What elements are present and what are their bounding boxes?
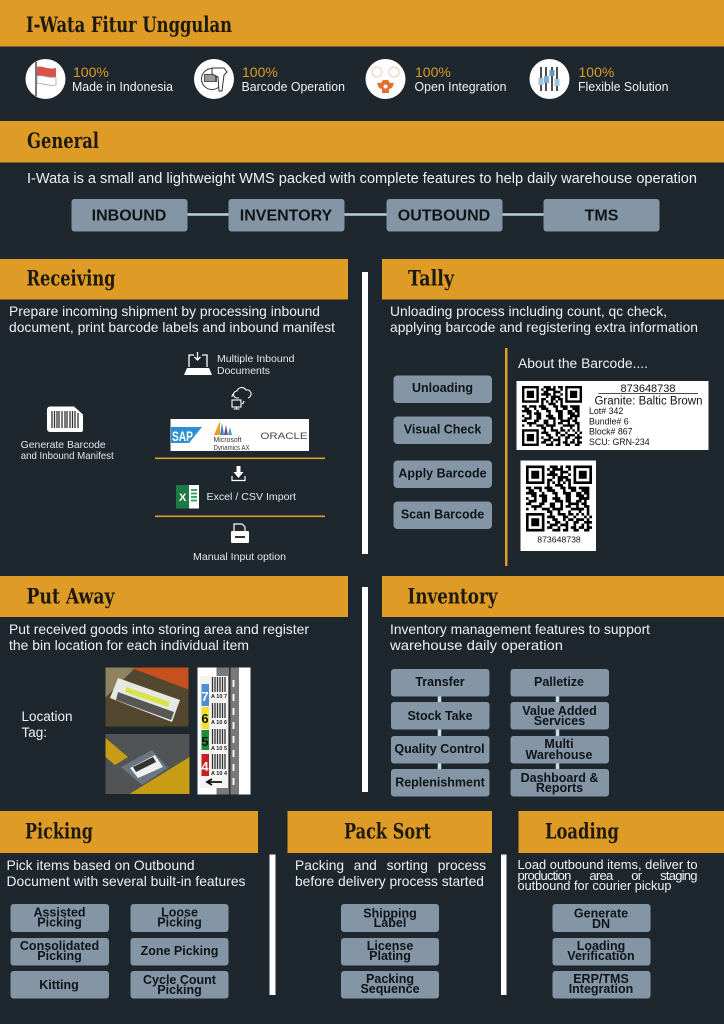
button: Unloading xyxy=(394,376,492,403)
icon: flag xyxy=(26,59,66,99)
button: Cycle Count Picking: Picking xyxy=(157,983,202,997)
button: Shipping Label: Shipping xyxy=(363,906,417,920)
button: Zone Picking: Zone Picking xyxy=(141,944,218,958)
text: Location Tag: Location xyxy=(22,709,73,724)
photo: floor location tag xyxy=(106,734,190,794)
text: Receiving description: Prepare incoming shipment by processing inbound xyxy=(9,303,320,319)
heading band: Inventory: Inventory xyxy=(408,584,498,608)
button: Consolidated Picking: Consolidated xyxy=(20,939,99,953)
barcode label: large: Lot# 342 xyxy=(589,406,623,416)
heading band: Loading: Loading xyxy=(545,818,619,844)
button: Shipping Label: Label xyxy=(374,916,406,930)
feature: Open Integration: Open Integration xyxy=(414,79,506,94)
photo: rack location labels: 4 xyxy=(201,759,209,774)
text: Picking description: Pick items based on Outbound xyxy=(6,857,194,873)
inventory buttons: right column xyxy=(510,669,609,796)
button: Quality Control: Quality Control xyxy=(394,742,485,756)
button: Dashboard & Reports xyxy=(510,769,609,796)
feature: Barcode Operation: Barcode Operation xyxy=(242,79,345,94)
button: Multi Warehouse: Multi xyxy=(544,737,574,751)
button: Generate DN: Generate xyxy=(574,906,628,920)
heading band: Picking: Picking xyxy=(25,818,93,844)
generate barcode block: Generate Barcode xyxy=(21,440,106,451)
logos: SAP, Microsoft Dynamics, Oracle: Microsoft xyxy=(214,435,242,444)
button: Palletize: Palletize xyxy=(534,675,584,689)
icon: sliders xyxy=(530,59,570,99)
button: Kitting xyxy=(10,971,109,998)
button: Shipping Label xyxy=(341,904,439,932)
feature: Flexible Solution xyxy=(530,59,668,99)
barcode label: small: 873648738 xyxy=(537,534,581,544)
logos: SAP, Microsoft Dynamics, Oracle: SAP xyxy=(172,429,193,444)
barcode label: large: 873648738 xyxy=(620,383,676,395)
button: Apply Barcode: Apply Barcode xyxy=(398,466,487,480)
barcode label: large: Granite: Baltic Brown xyxy=(594,396,703,408)
text: Put Away description: Put received goods into storing area and register xyxy=(9,621,309,637)
button: INVENTORY: INVENTORY xyxy=(240,208,333,224)
text: Multiple Inbound Documents: Multiple Inbound xyxy=(217,354,295,365)
barcode label: large: Bundle# 6 xyxy=(589,416,629,426)
text: About the Barcode: About the Barcode.... xyxy=(518,356,648,371)
divider xyxy=(270,854,276,995)
icon: download xyxy=(232,466,245,480)
button: Replenishment: Replenishment xyxy=(395,776,486,790)
divider xyxy=(362,272,368,554)
icon: barcode tag xyxy=(47,406,83,432)
text: Put Away description: the bin location for each individual item xyxy=(9,637,249,653)
button: Packing Sequence: Sequence xyxy=(360,982,420,996)
button: Scan Barcode xyxy=(394,502,492,529)
text: Manual Input option: Manual Input option xyxy=(193,552,286,563)
button: Multi Warehouse: Warehouse xyxy=(526,748,592,762)
feature: Flexible Solution: Flexible Solution xyxy=(578,79,668,94)
text: Receiving description: document, print barcode labels and inbound manifest xyxy=(9,319,335,335)
inbound sources xyxy=(155,352,325,563)
text: Pack Sort description: before delivery process started xyxy=(295,873,484,889)
text: Location Tag: Tag: xyxy=(22,725,47,740)
button: License Plating: License xyxy=(367,939,413,953)
button: Value Added Services xyxy=(510,702,609,730)
photo: rack location labels: A 10 4 xyxy=(211,771,228,777)
heading band: Pack Sort: Pack Sort xyxy=(344,818,431,844)
text: Loading description: outbound for courier pickup xyxy=(518,878,672,893)
button: Value Added Services: Services xyxy=(534,714,585,728)
button: Cycle Count Picking xyxy=(130,971,228,998)
picking buttons xyxy=(10,904,228,998)
button: Loading Verification: Loading xyxy=(577,939,625,953)
feature: Made in Indonesia xyxy=(26,59,174,99)
generate barcode block: and Inbound Manifest xyxy=(21,451,114,462)
button: INVENTORY xyxy=(228,199,344,232)
heading band: Receiving: Receiving xyxy=(26,266,116,290)
barcode label: large: Block# 867 xyxy=(589,426,633,436)
button: Dashboard & Reports: Reports xyxy=(536,781,583,795)
divider xyxy=(501,854,506,995)
icon: Excel: X xyxy=(179,492,187,504)
text: Pack Sort description: Packing and sorting process xyxy=(295,857,486,873)
heading band: Loading xyxy=(518,811,724,853)
text: Inventory description: warehouse daily operation xyxy=(389,637,563,653)
icon: printer xyxy=(231,524,249,543)
button: ERP/TMS Integration: ERP/TMS xyxy=(573,972,629,986)
heading band: General xyxy=(0,121,724,162)
button: Value Added Services: Value Added xyxy=(522,704,597,718)
inventory buttons: left column xyxy=(391,669,490,796)
logos: SAP, Microsoft Dynamics, Oracle xyxy=(170,419,309,452)
icon: laptop download xyxy=(184,352,212,375)
logos: SAP, Microsoft Dynamics, Oracle: ORACLE xyxy=(260,431,308,442)
feature: Flexible Solution: 100% xyxy=(578,64,614,80)
text: Loading description: production area or staging xyxy=(518,868,698,883)
button: Multi Warehouse xyxy=(510,736,609,764)
text: Picking description: Document with several built-in features xyxy=(6,873,246,889)
button: Apply Barcode xyxy=(394,460,492,488)
divider: gold vertical xyxy=(505,348,508,566)
button: Consolidated Picking: Picking xyxy=(37,949,82,963)
button: TMS xyxy=(544,199,660,232)
text: Inventory description: Inventory management features to support xyxy=(390,621,650,637)
heading band: Receiving xyxy=(0,259,348,300)
button: Loading Verification: Verification xyxy=(567,949,635,963)
button: Assisted Picking xyxy=(10,904,109,932)
button: Visual Check: Visual Check xyxy=(404,422,481,436)
feature: Barcode Operation: 100% xyxy=(242,64,278,80)
feature: Barcode Operation xyxy=(194,59,345,99)
generate barcode block xyxy=(21,406,114,462)
button: Consolidated Picking xyxy=(10,938,109,966)
flow: modules xyxy=(72,199,660,232)
photo: rack location labels: 6 xyxy=(201,711,209,726)
button: Assisted Picking: Picking xyxy=(37,916,82,930)
heading band: Inventory xyxy=(382,576,724,617)
heading band: I-Wata Fitur Unggulan xyxy=(0,0,724,46)
heading band: I-Wata Fitur Unggulan: I-Wata Fitur Unggulan xyxy=(26,12,232,37)
button: Loose Picking: Loose xyxy=(161,906,198,920)
heading band: General: General xyxy=(27,128,99,153)
button: License Plating: Plating xyxy=(369,949,411,963)
text: Multiple Inbound Documents: Documents xyxy=(217,366,270,377)
heading band: Pack Sort xyxy=(288,811,492,853)
button: Loading Verification xyxy=(552,938,650,966)
button: License Plating xyxy=(341,938,439,966)
feature: Made in Indonesia: Made in Indonesia xyxy=(72,79,174,94)
tally step buttons xyxy=(394,376,492,529)
barcode label: large: SCU: GRN-234 xyxy=(589,437,650,447)
button: Stock Take: Stock Take xyxy=(407,709,473,723)
button: Transfer: Transfer xyxy=(415,675,465,689)
button: ERP/TMS Integration: Integration xyxy=(569,982,633,996)
heading band: Tally xyxy=(382,259,724,300)
photo: rack location labels: A 10 5 xyxy=(211,746,227,752)
logos: SAP, Microsoft Dynamics, Oracle: Dynamics AX xyxy=(214,443,250,452)
divider xyxy=(362,587,368,792)
loading buttons xyxy=(552,904,650,998)
button: Visual Check xyxy=(394,416,492,444)
icon: open integration xyxy=(366,59,406,99)
button: ERP/TMS Integration xyxy=(552,971,650,998)
text: Tally description: Unloading process including count, qc check, xyxy=(390,303,667,319)
icon: barcode scanner xyxy=(194,59,234,99)
photo: hanging location tag xyxy=(106,668,188,726)
button: Dashboard & Reports: Dashboard & xyxy=(521,771,598,785)
pack sort buttons xyxy=(341,904,439,998)
feature: Open Integration: 100% xyxy=(415,64,451,80)
text: Loading description: Load outbound items, deliver to xyxy=(518,857,698,872)
button: Kitting: Kitting xyxy=(39,978,79,992)
photo: rack location labels: A 10 7 xyxy=(211,694,227,700)
button: INBOUND xyxy=(72,199,188,232)
photo: rack location labels: A 10 6 xyxy=(211,720,227,726)
button: Loose Picking xyxy=(130,904,228,932)
text: Tally description: applying barcode and registering extra information xyxy=(390,319,698,335)
button: Assisted Picking: Assisted xyxy=(33,906,86,920)
divider: gold xyxy=(155,458,325,459)
button: OUTBOUND: OUTBOUND xyxy=(398,208,490,224)
button: Scan Barcode: Scan Barcode xyxy=(401,508,484,522)
button: TMS: TMS xyxy=(585,208,619,224)
button: Generate DN: DN xyxy=(592,917,610,931)
divider: gold xyxy=(155,516,325,517)
barcode label: large xyxy=(516,381,708,450)
button: OUTBOUND xyxy=(386,199,502,232)
button: Zone Picking xyxy=(130,938,228,966)
button: Generate DN xyxy=(552,904,650,932)
button: Packing Sequence: Packing xyxy=(366,972,414,986)
text: General description: I-Wata is a small and lightweight WMS packed with complete features to help daily warehouse operation xyxy=(27,170,697,187)
heading band: Put Away: Put Away xyxy=(26,584,115,608)
feature: Open Integration xyxy=(366,59,506,99)
heading band: Put Away xyxy=(0,576,348,617)
photo: rack location labels: 7 xyxy=(201,689,209,704)
photo: rack location labels xyxy=(198,668,250,794)
icon: Excel xyxy=(176,485,199,508)
feature: Made in Indonesia: 100% xyxy=(73,64,109,80)
icon: cloud sync xyxy=(232,388,251,409)
button: INBOUND: INBOUND xyxy=(92,208,166,224)
heading band: Tally: Tally xyxy=(408,266,455,290)
photo: rack location labels: 5 xyxy=(201,734,209,749)
button: Packing Sequence xyxy=(341,971,439,998)
button: Unloading: Unloading xyxy=(412,381,473,395)
heading band: Picking xyxy=(0,811,258,853)
barcode label: small xyxy=(520,460,596,551)
button: Cycle Count Picking: Cycle Count xyxy=(143,973,217,987)
text: Excel / CSV Import: Excel / CSV Import xyxy=(206,492,296,503)
button: Loose Picking: Picking xyxy=(157,916,202,930)
